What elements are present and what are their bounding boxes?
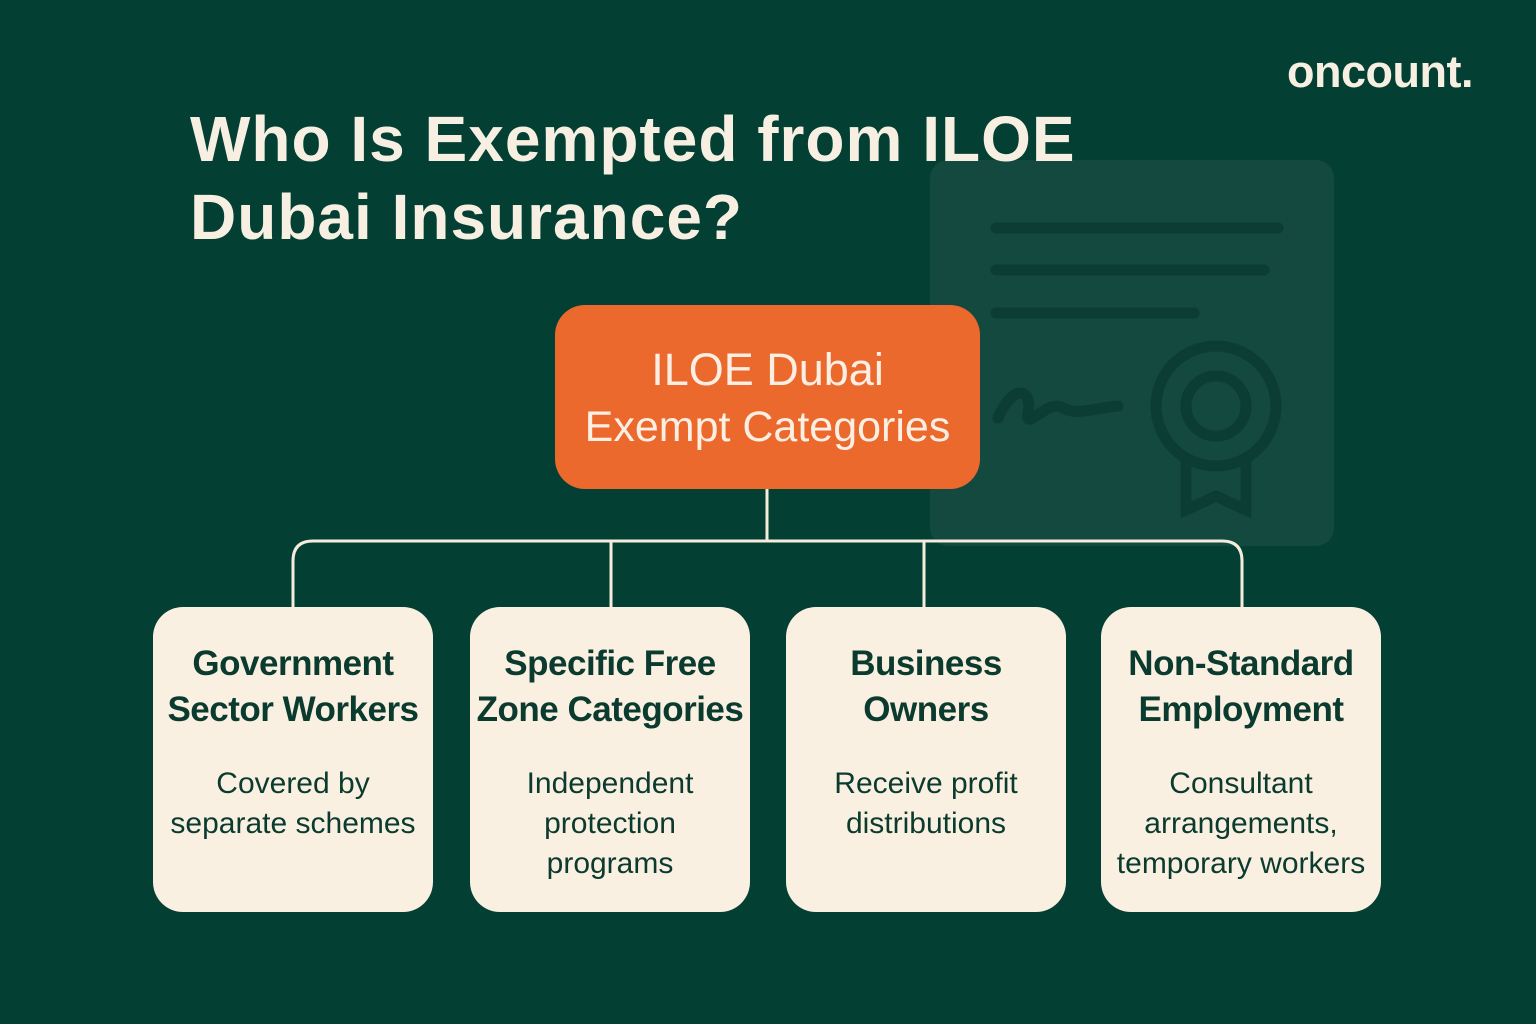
card: free zone: Independent xyxy=(527,767,693,800)
central box: exempt categories xyxy=(555,305,980,489)
central box: exempt categories: ILOE Dubai xyxy=(651,344,884,395)
card: non-standard: temporary workers xyxy=(1117,847,1365,880)
card: free zone: Specific Free xyxy=(504,644,716,683)
card: free zone: protection xyxy=(544,807,676,840)
card: non-standard xyxy=(1101,607,1381,912)
title: Who Is Exempted from ILOE xyxy=(190,103,1076,175)
title: Dubai Insurance? xyxy=(190,181,743,253)
card: business owners xyxy=(786,607,1066,912)
card: business owners: Receive profit xyxy=(834,767,1018,800)
central box: exempt categories: Exempt Categories xyxy=(585,403,950,451)
card: government: Sector Workers xyxy=(167,690,419,729)
card: government xyxy=(153,607,433,912)
icon: background document xyxy=(930,160,1334,546)
card: non-standard: Non-Standard xyxy=(1128,644,1354,683)
card: business owners: Owners xyxy=(863,690,989,729)
card: government: Government xyxy=(192,644,394,683)
card: free zone xyxy=(470,607,750,912)
card: government: Covered by xyxy=(216,767,370,800)
card: free zone: programs xyxy=(547,847,673,880)
title xyxy=(190,103,1076,253)
card: non-standard: arrangements, xyxy=(1144,807,1338,840)
card: business owners: distributions xyxy=(846,807,1006,840)
card: free zone: Zone Categories xyxy=(477,690,743,729)
card: business owners: Business xyxy=(850,644,1002,683)
card: non-standard: Employment xyxy=(1138,690,1344,729)
card: non-standard: Consultant xyxy=(1169,767,1313,800)
card: government: separate schemes xyxy=(170,807,416,840)
logo: oncount. xyxy=(1287,46,1473,97)
